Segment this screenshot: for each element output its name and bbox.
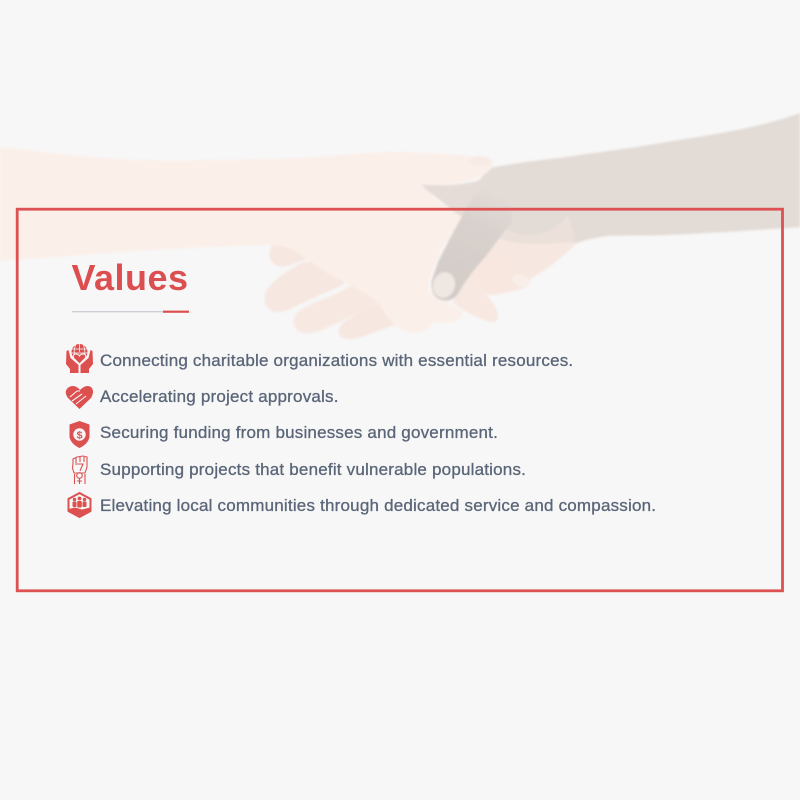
value 3 [70,421,498,448]
text: Accelerating project approvals. [100,387,339,406]
light finger nail [510,272,532,290]
icon: heart with handshake [66,386,93,409]
rear finger 4 [339,302,398,339]
icon: raised fist with female symbol [72,456,87,484]
text: Connecting charitable organizations with essential resources. [100,351,573,370]
icon: shield with dollar: $ [77,430,83,442]
text: Elevating local communities through dedicated service and compassion. [100,496,656,515]
rear finger 2 [265,262,345,312]
lower light finger [452,276,498,322]
background photo: clasped hands [0,113,800,339]
light fingertip right of thumb [462,245,530,295]
heading: Values: Values [72,257,189,298]
value 2 [66,386,339,409]
value 5 [68,493,656,517]
value 1 [66,344,573,373]
icon: hexagon with community in hand [68,493,90,517]
dark thumb [431,180,512,301]
text: Supporting projects that benefit vulnerable populations. [100,460,526,479]
palm creases [497,214,576,244]
rear finger 3 [294,280,385,333]
heading underline [72,311,189,313]
text: Securing funding from businesses and government. [100,423,498,442]
peach palm of dark hand [460,236,577,295]
thumb nail [430,270,458,300]
light arm and hand [0,147,493,333]
rear finger 1 [269,240,310,266]
dark arm [470,113,800,250]
dark finger under light thumb [418,178,492,225]
icon: shield with dollar [70,421,90,448]
value 4 [72,456,526,484]
icon: hands holding globe and heart [66,344,93,373]
light thumb nail [469,156,491,166]
frame [17,209,782,591]
